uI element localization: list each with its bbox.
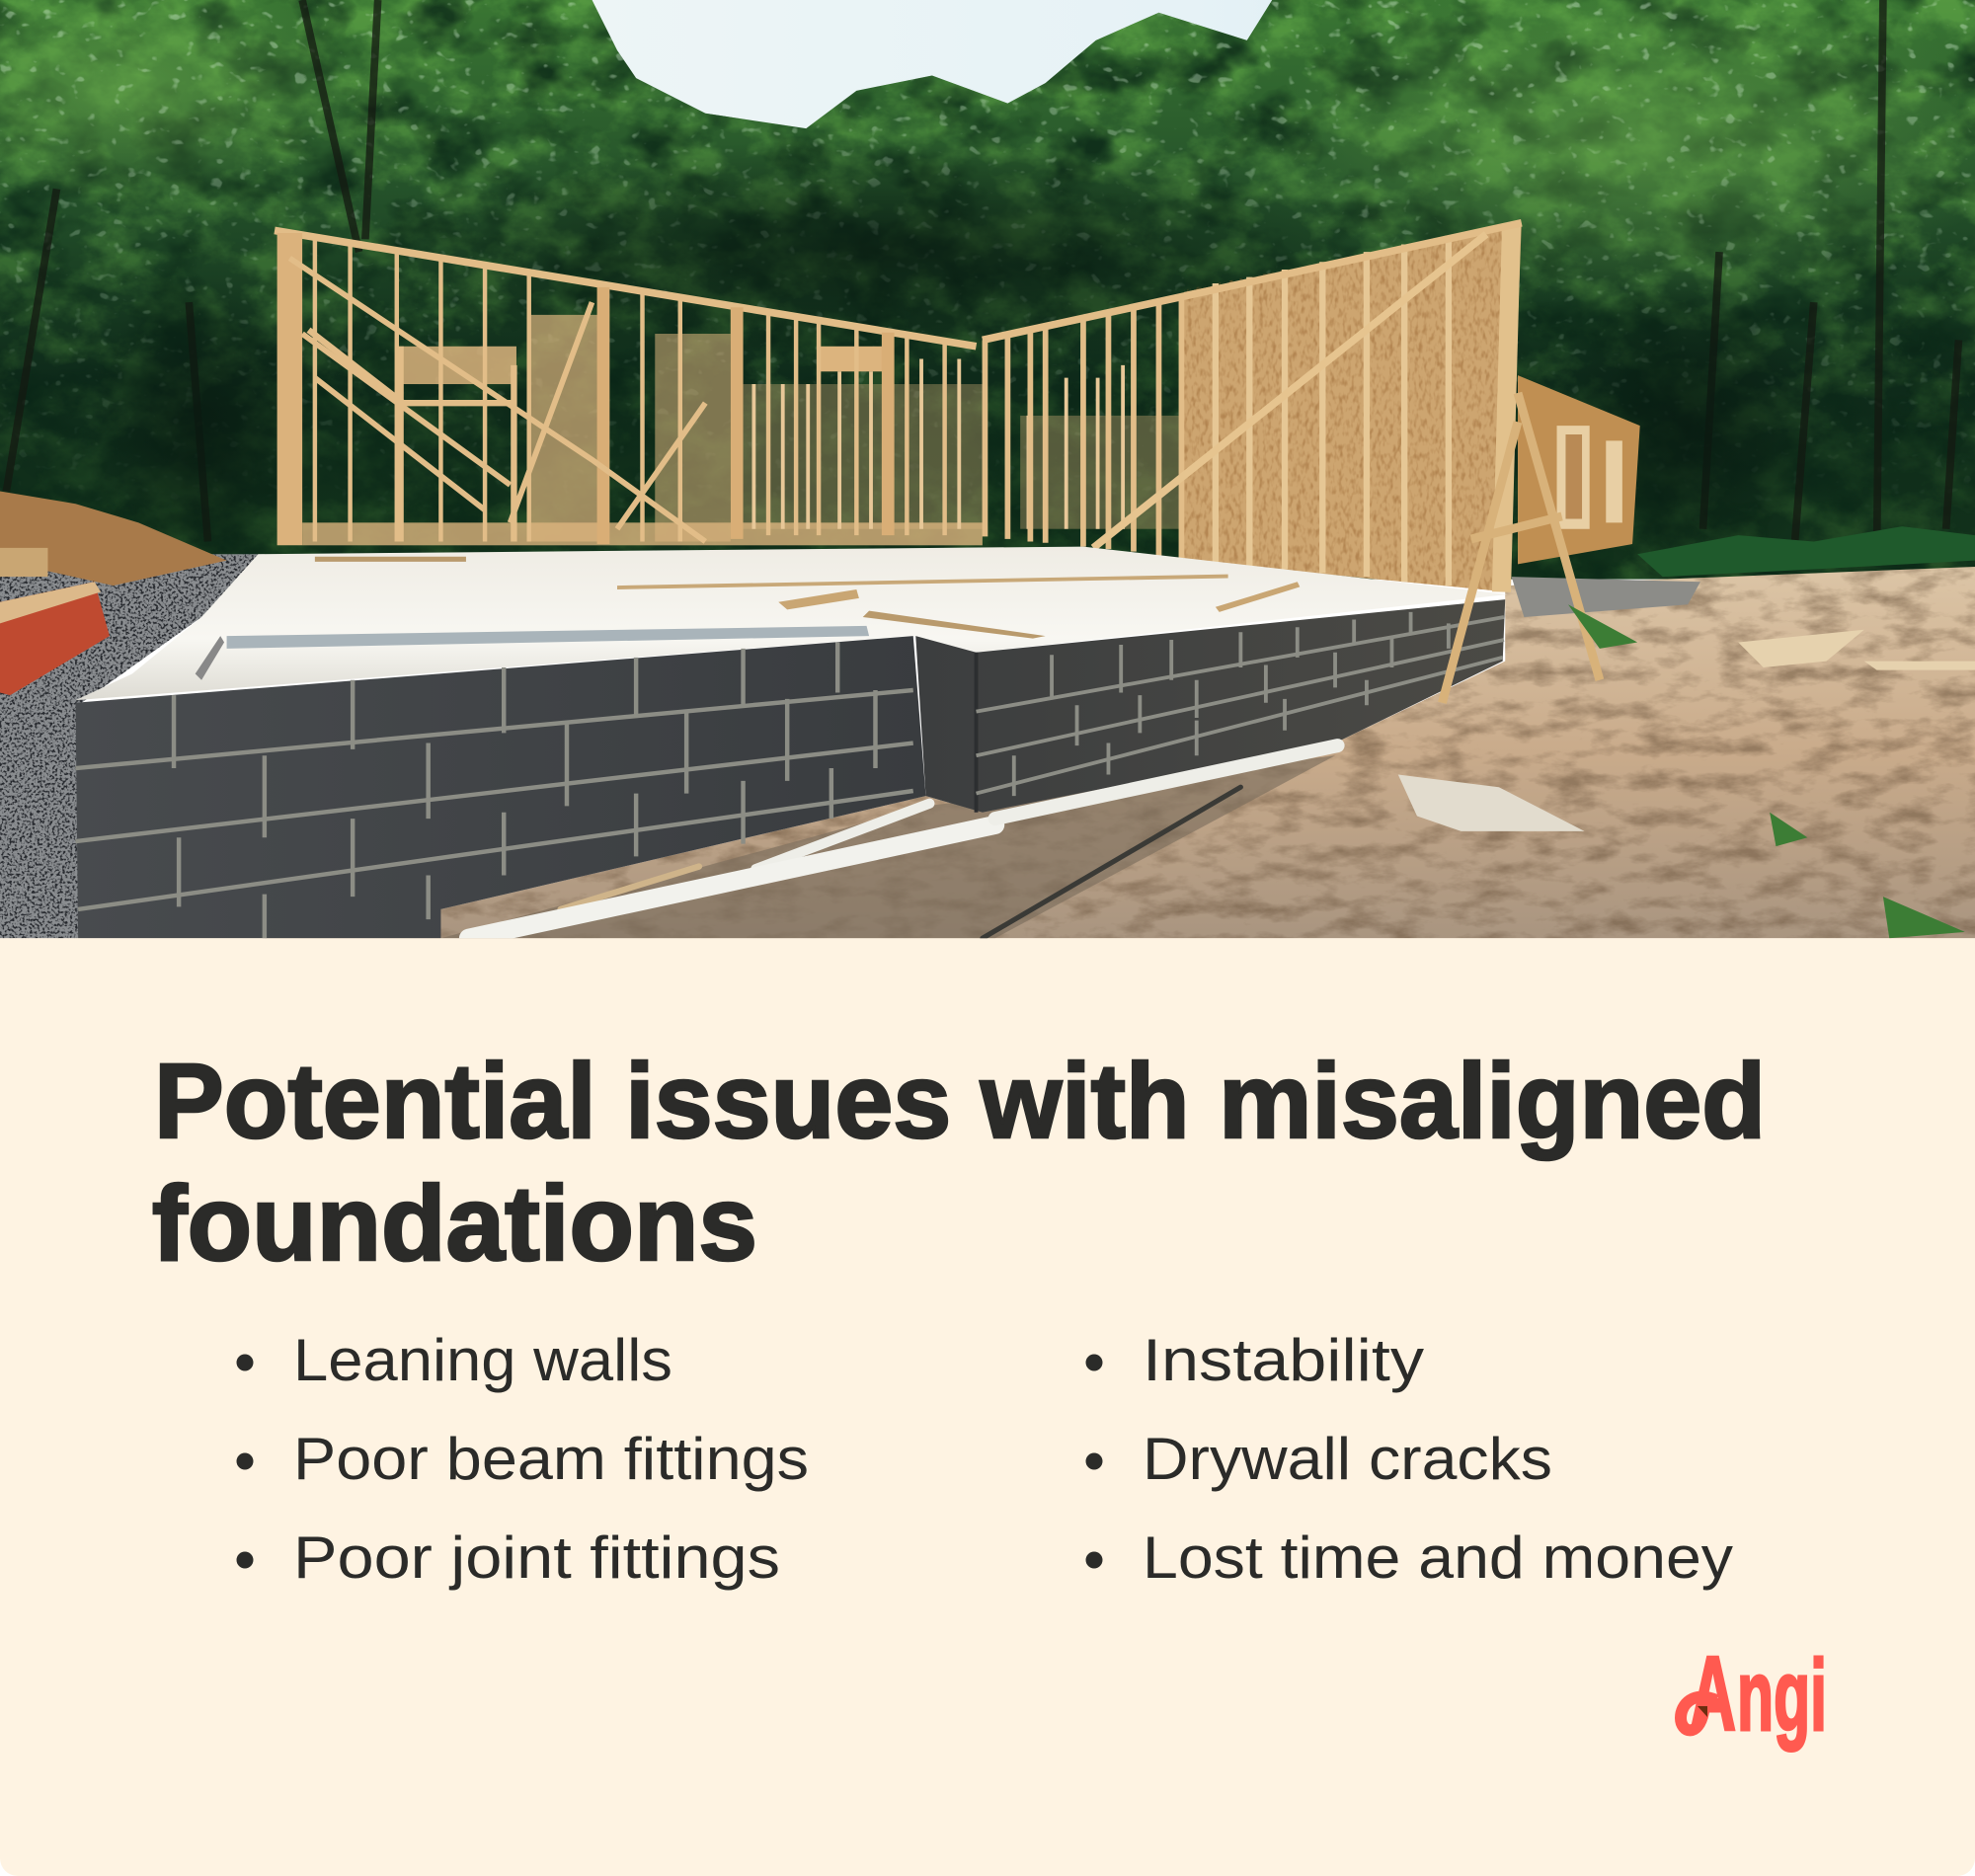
concrete slab [76, 547, 1508, 700]
title: Potential issues with misaligned [154, 1041, 1766, 1160]
lumber pile left [0, 548, 47, 577]
list: right column [1086, 1327, 1733, 1591]
gravel [0, 541, 277, 938]
logo: Angi: A [1690, 1634, 1736, 1753]
left framed wall studs [275, 230, 977, 545]
list: left column: Poor joint fittings [293, 1524, 780, 1591]
white drain pipes [468, 745, 1338, 938]
list: left column: Poor beam fittings [293, 1426, 809, 1492]
sheathed right wall [983, 214, 1537, 604]
interior wood framing clutter [302, 315, 1184, 545]
small green plants [1568, 604, 1965, 938]
title: foundations [152, 1163, 757, 1283]
sky [592, 0, 1272, 128]
wooden brace [1442, 393, 1600, 703]
list: right column: Drywall cracks [1143, 1426, 1552, 1492]
block wall side [915, 599, 1505, 813]
panel: cream text panel [0, 889, 1975, 1876]
list: left column: Leaning walls [293, 1327, 672, 1393]
concrete chunk [1398, 774, 1585, 831]
block wall front [76, 636, 925, 938]
right framed wall studs [985, 234, 1486, 558]
logo: Angi [1681, 1634, 1827, 1753]
logo: Angi: ngi [1737, 1639, 1827, 1752]
photo: house framing on concrete block foundation [0, 0, 1975, 938]
list: left column [237, 1327, 809, 1591]
ground dirt [252, 554, 1975, 938]
dirt pile [0, 491, 227, 586]
title [152, 1041, 1766, 1283]
list: right column: Lost time and money [1143, 1524, 1733, 1591]
lumber stack red [0, 582, 110, 695]
back building wall [1518, 375, 1640, 564]
shrubs at tree line [1637, 526, 1975, 577]
list: right column: Instability [1143, 1327, 1424, 1393]
tree canopy background [0, 0, 1975, 580]
